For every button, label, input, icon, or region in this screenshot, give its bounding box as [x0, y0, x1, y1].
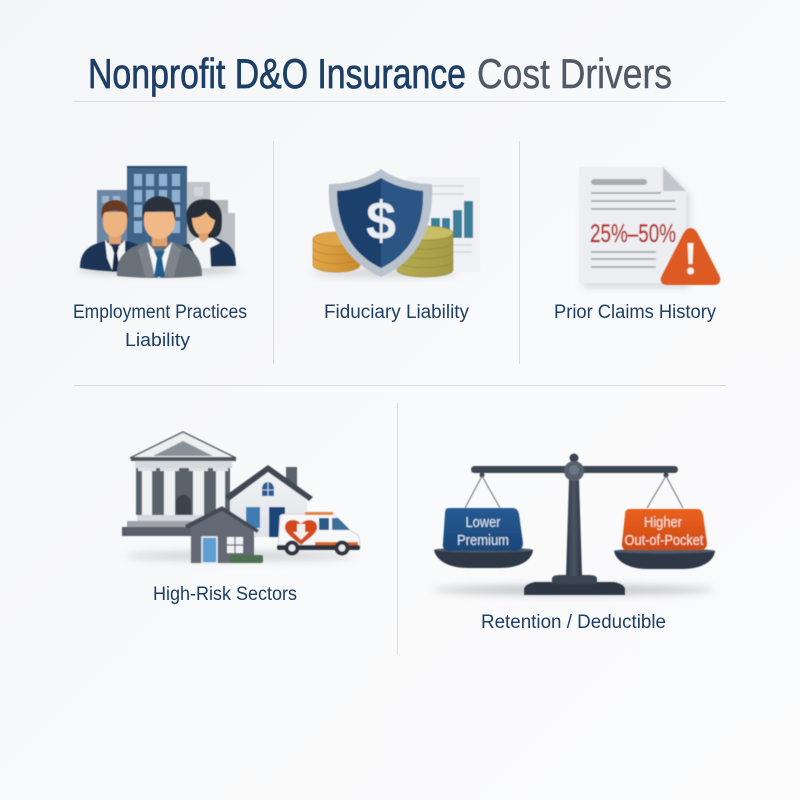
icon: bank, houses and ambulance: [122, 432, 360, 563]
label: retention / deductible: Retention / Deductible: [481, 612, 666, 633]
panel: employment practices liability: [73, 166, 247, 350]
shield: [329, 169, 432, 277]
panel: prior claims history: [554, 167, 720, 323]
gold coins: [313, 232, 360, 272]
icon: business people and office buildings: [76, 166, 240, 278]
olive coins: [397, 226, 453, 277]
warning triangle: [661, 228, 720, 285]
right pan with weight: Out-of-Pocket: [624, 532, 704, 549]
panel: high-risk sectors: [122, 432, 360, 605]
icon: claims document with warning: 25%–50%: [590, 220, 676, 248]
person: right woman: [181, 199, 236, 268]
left pan with weight: Lower: [466, 514, 500, 531]
label: employment practices liability: Employment Practices: [73, 302, 247, 323]
label: fiduciary liability: Fiduciary Liability: [324, 302, 469, 323]
right pan with weight: [614, 476, 715, 569]
icon: balance scale: [434, 454, 715, 595]
label: employment practices liability: [73, 302, 247, 350]
ambulance: [277, 512, 360, 556]
panel: fiduciary liability: [310, 169, 480, 323]
panel: retention / deductible: [434, 454, 715, 633]
left pan with weight: [434, 472, 668, 568]
right pan with weight: Higher: [644, 514, 682, 531]
scale stand and beam: [471, 454, 678, 595]
small house: [185, 506, 263, 563]
person: left man: [80, 200, 142, 272]
left pan with weight: Premium: [457, 532, 509, 549]
label: high-risk sectors: High-Risk Sectors: [153, 584, 297, 605]
bank building: [122, 432, 236, 536]
report with bar chart: [407, 177, 480, 272]
icon: claims document with warning: [579, 167, 720, 288]
label: employment practices liability: Liability: [125, 329, 191, 350]
icon: shield, coins and chart: [310, 169, 480, 277]
title: Nonprofit D&O Insurance: [88, 50, 466, 97]
label: prior claims history: Prior Claims History: [554, 302, 716, 323]
person: centre man in grey suit: [117, 196, 202, 278]
large house: [225, 465, 313, 537]
shield: $: [366, 191, 396, 251]
title: Cost Drivers: [477, 50, 672, 97]
